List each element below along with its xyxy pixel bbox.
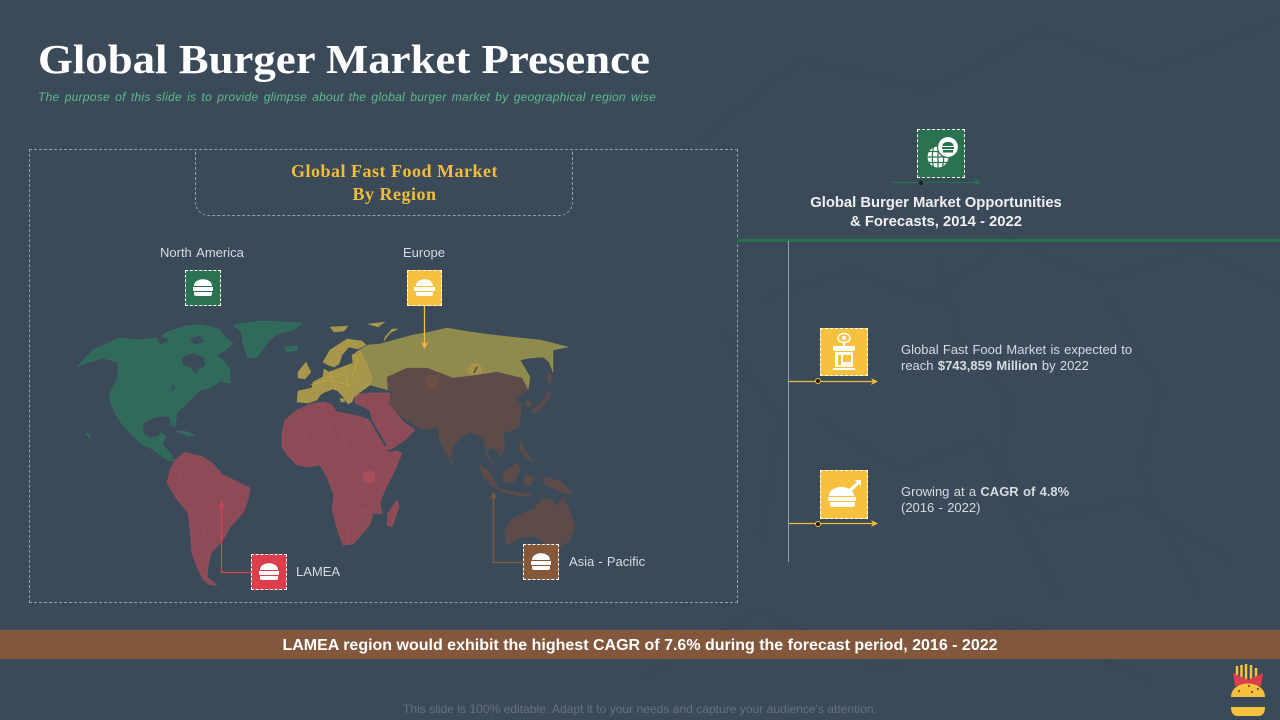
title: Global Burger Market Presence bbox=[38, 36, 650, 82]
text: market forecast bbox=[901, 342, 1132, 373]
subtitle: The purpose of this slide is to provide glimpse about the global burger market by geographical region wise bbox=[38, 90, 656, 104]
heading: opportunities and forecasts: Global Burger Market Opportunities bbox=[810, 195, 1062, 211]
region: Asia-Pacific bbox=[387, 368, 575, 548]
divider: green horizontal bbox=[737, 239, 1280, 242]
label: Europe: Europe bbox=[403, 245, 445, 260]
callout bar bbox=[0, 630, 1280, 659]
region: North America bbox=[77, 321, 303, 461]
text: CAGR: Growing at a CAGR of 4.8% bbox=[901, 484, 1069, 499]
footer note: This slide is 100% editable. Adapt it to your needs and capture your audience's attention. bbox=[403, 702, 877, 716]
panel heading: fast food market by region: Global Fast Food Market bbox=[291, 161, 498, 181]
panel heading: fast food market by region bbox=[195, 149, 573, 216]
icon: North America burger bbox=[185, 270, 221, 306]
region: Europe and Russia bbox=[297, 322, 568, 404]
icon: food shop bbox=[820, 328, 868, 376]
label: North America: North America bbox=[160, 245, 244, 260]
icon: Asia-Pacific burger bbox=[523, 544, 559, 580]
icon: globe with burger bubble bbox=[917, 129, 965, 178]
icon: LAMEA burger bbox=[251, 554, 287, 590]
icon: burger with growth arrow bbox=[820, 470, 868, 519]
heading: opportunities and forecasts bbox=[810, 195, 1062, 230]
divider: vertical bbox=[788, 241, 789, 562]
panel heading: fast food market by region: By Region bbox=[352, 184, 436, 204]
Hudson Bay cut-out bbox=[155, 335, 205, 392]
text: CAGR: (2016 - 2022) bbox=[901, 500, 980, 515]
label: LAMEA: LAMEA bbox=[296, 564, 340, 579]
text: market forecast: reach $743,859 Million by 2022 bbox=[901, 358, 1089, 373]
Red Sea and gulfs cut-out bbox=[371, 420, 402, 451]
label: Asia-Pacific: Asia - Pacific bbox=[569, 554, 645, 569]
panel: map frame bbox=[29, 149, 738, 603]
callout bar: LAMEA region would exhibit the highest CAGR of 7.6% during the forecast period, 2016 - 2022 bbox=[282, 637, 998, 654]
text: CAGR bbox=[901, 484, 1069, 515]
heading: opportunities and forecasts: & Forecasts, 2014 - 2022 bbox=[850, 214, 1022, 230]
text: market forecast: Global Fast Food Market is expected to bbox=[901, 342, 1132, 357]
icon: Europe burger bbox=[407, 270, 442, 306]
region: LAMEA bbox=[167, 393, 415, 585]
